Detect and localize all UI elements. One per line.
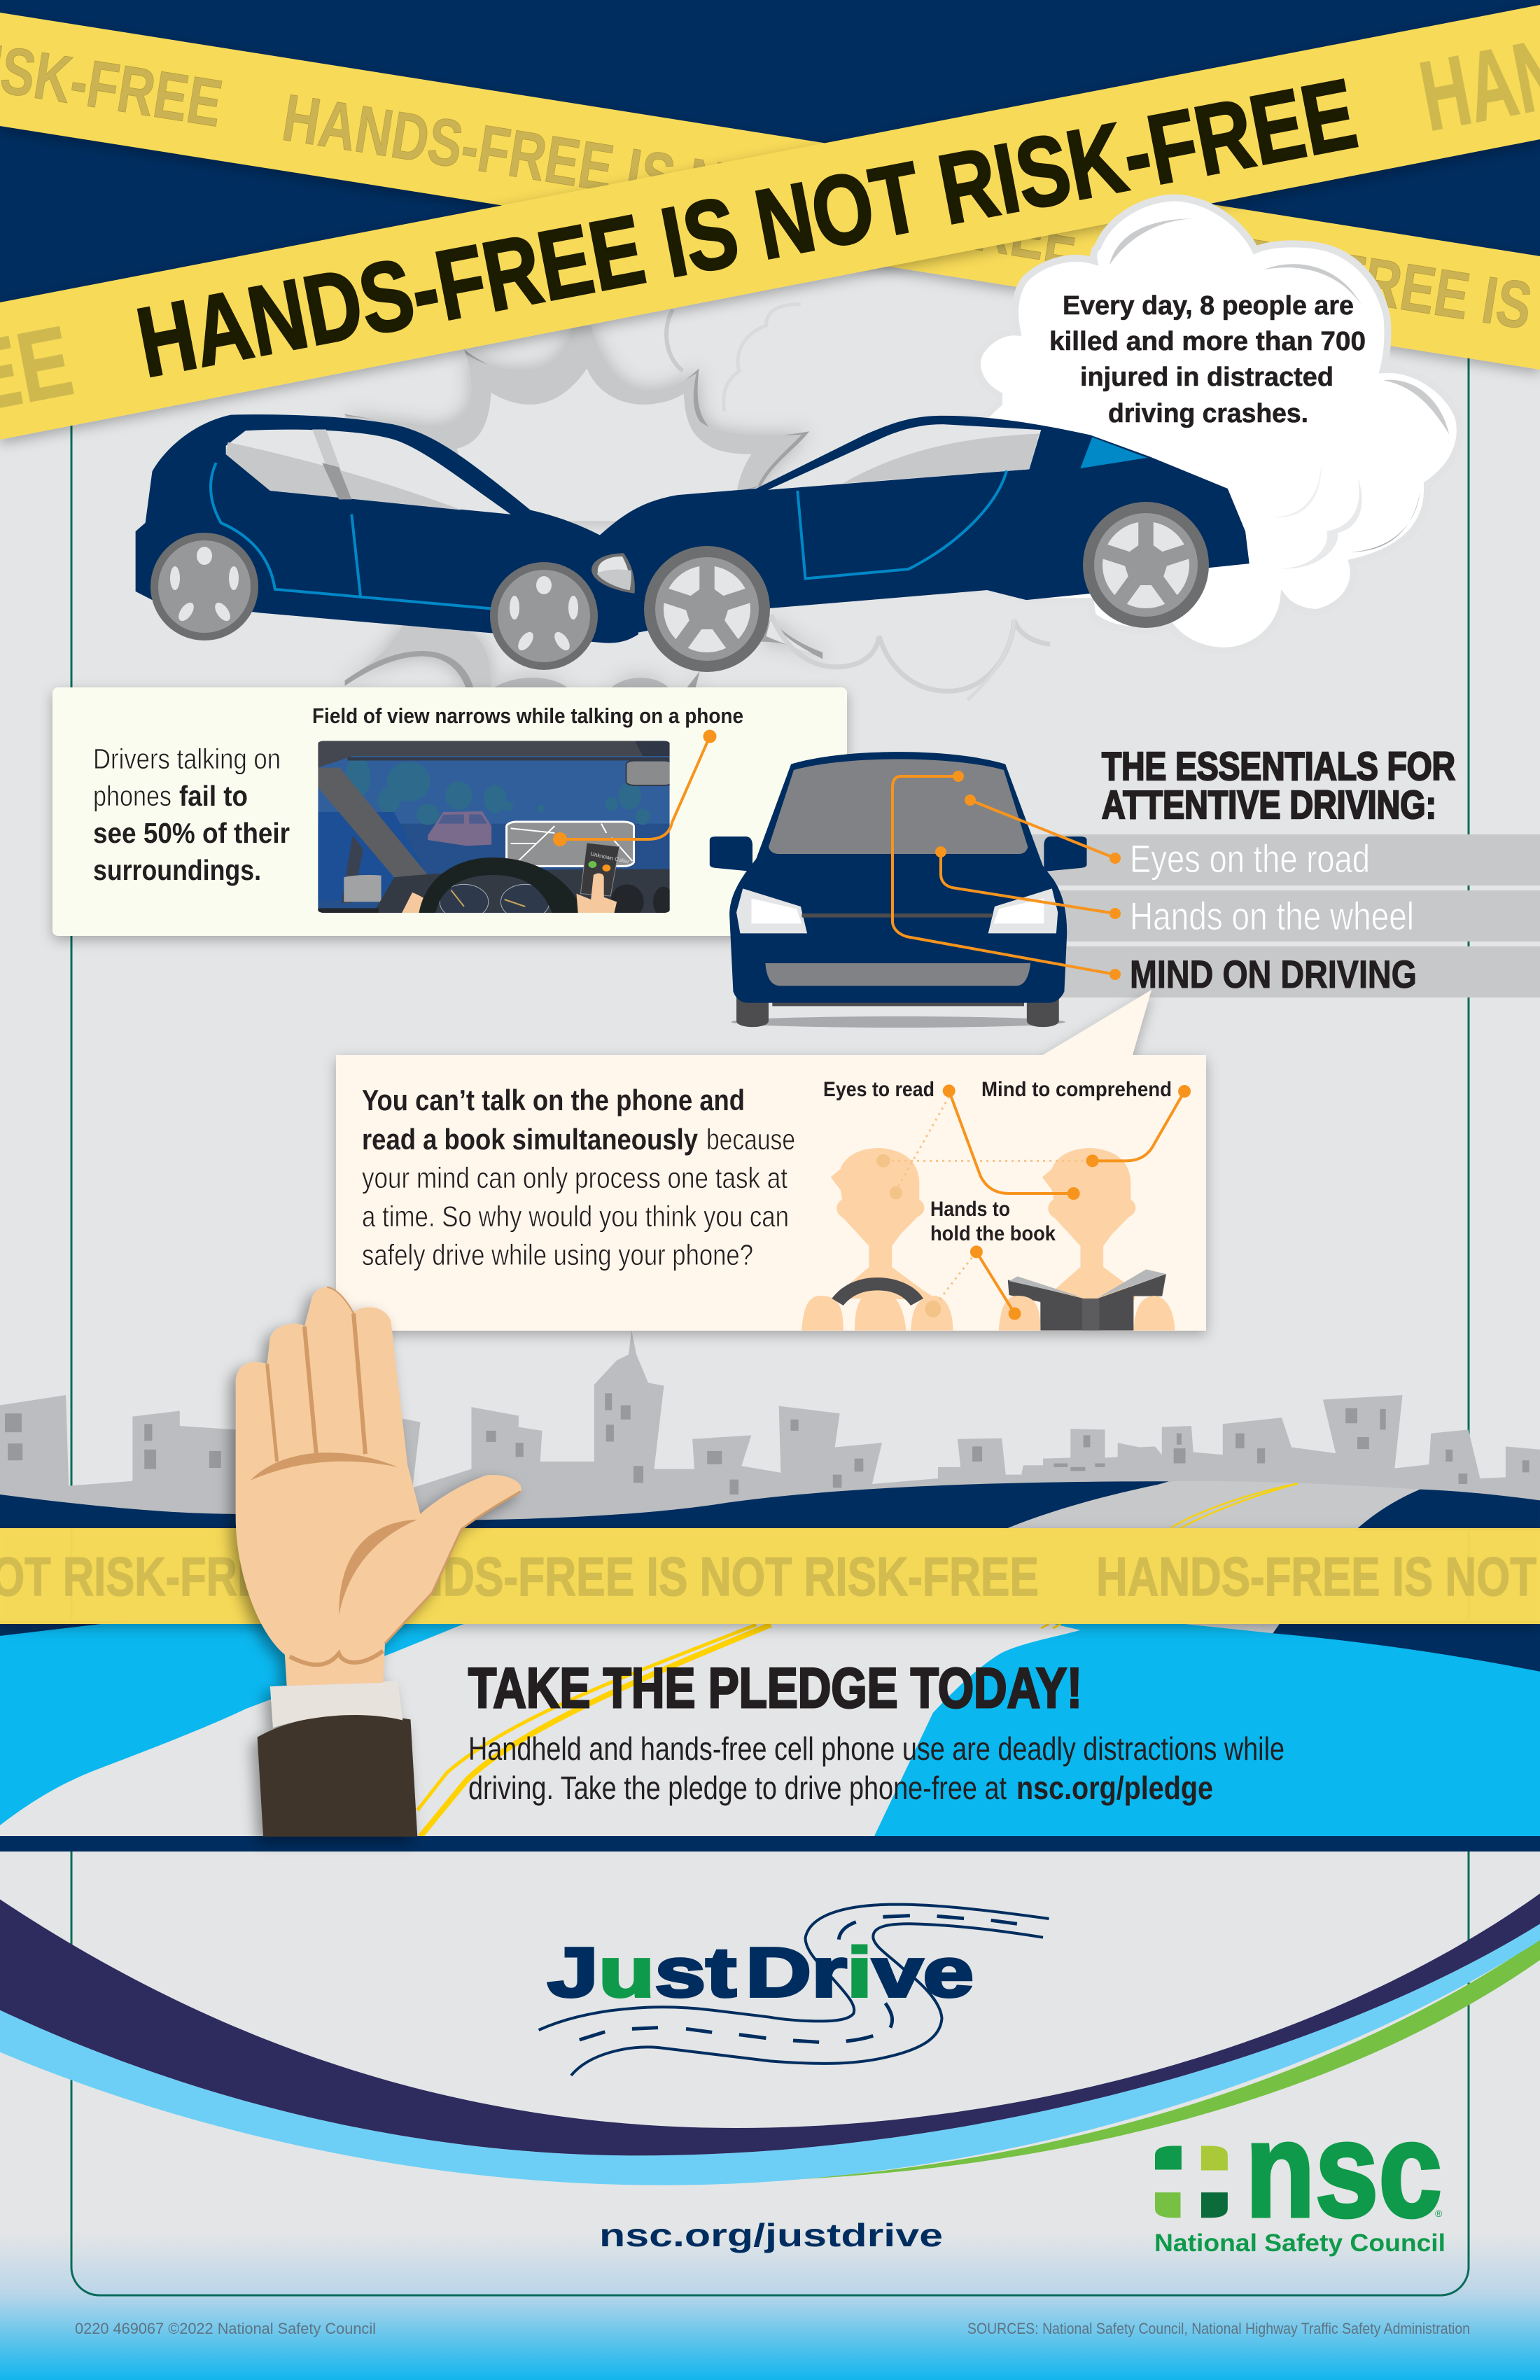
figure: reader: [1042, 1148, 1135, 1300]
lower burst: [345, 617, 822, 690]
heading: essentials: THE ESSENTIALS FOR: [1102, 744, 1455, 789]
council name: National Safety Council: [1154, 2230, 1446, 2257]
panel text: [362, 1084, 795, 1271]
label: mind on driving: MIND ON DRIVING: [1130, 952, 1417, 996]
labels on figures: Hands to: [930, 1198, 1010, 1221]
text: fail to see: Drivers talking on: [93, 743, 281, 775]
orange connector lines: [949, 1091, 1184, 1314]
word: Drive: Dr ive: [746, 1933, 974, 2012]
wheel: left car front: [490, 562, 598, 670]
logo: nsc: [1154, 2094, 1446, 2257]
footer gradient: [0, 2233, 1540, 2380]
band text: HANDS-FREE IS NOT RISK-FREE: [349, 1546, 1039, 1607]
label: hands on the wheel: Hands on the wheel: [1130, 894, 1414, 938]
statistic text: Every day, 8 people are: [1063, 291, 1354, 321]
labels on figures: hold the book: [930, 1222, 1056, 1245]
text: fail to see: surroundings.: [93, 854, 261, 886]
statistic text: driving crashes.: [1108, 399, 1308, 428]
wheel: right car rear: [1083, 502, 1209, 628]
panel text: because: [706, 1123, 795, 1156]
essentials bars: [1008, 834, 1540, 997]
label: eyes on the road: Eyes on the road: [1130, 836, 1370, 881]
text: fail to see: [93, 743, 290, 886]
navy header: [0, 0, 1540, 350]
smoke cloud with statistic: [966, 198, 1460, 651]
logo: JustDrive: [539, 1905, 1049, 2076]
icon: raised hand: [236, 1287, 522, 1837]
statistic text: killed and more than 700: [1049, 327, 1366, 356]
smoke outlines: [666, 304, 1050, 700]
callout dot top: [703, 729, 717, 743]
swooshes: [0, 1893, 1540, 2185]
left car: [136, 414, 638, 670]
clear view window: [507, 822, 634, 866]
palm and fingers: [236, 1287, 522, 1686]
pledge body text: driving. Take the pledge to drive phone-free at: [468, 1770, 1007, 1806]
front view car: [710, 752, 1121, 1028]
green swoosh: [770, 1939, 1540, 2180]
logo road: [539, 1905, 1049, 2076]
pledge body text: nsc.org/pledge: [1016, 1770, 1213, 1806]
sleeve: [258, 1715, 417, 1837]
figure: driver: [802, 1148, 953, 1331]
upper burst: [344, 326, 809, 521]
crashed cars: [136, 414, 1250, 672]
footer sources: SOURCES: National Safety Council, National Highway Traffic Safety Administration: [967, 2320, 1470, 2337]
text: fail to see: phones: [93, 780, 172, 812]
crash bursts and smoke: [344, 304, 1050, 700]
url: just drive: nsc.org/justdrive: [599, 2217, 943, 2253]
panel text: a time. So why would you think you can: [362, 1200, 789, 1233]
callout dot window: [553, 832, 567, 846]
callout line: [560, 736, 710, 839]
wheel: left car rear: [150, 533, 258, 640]
figures: driver and reader: [802, 1084, 1191, 1331]
caution tape band: [0, 1528, 1540, 1624]
panel text: read a book simultaneously: [362, 1123, 699, 1156]
caption: field of view: Field of view narrows while talking on a phone: [312, 704, 743, 728]
text: fail to see: fail to: [179, 780, 248, 812]
back tape text middle: HANDS-FREE IS NOT RISK-FREE: [278, 80, 1084, 280]
nsc wordmark: nsc: [1245, 2094, 1442, 2245]
right car: [592, 416, 1250, 672]
cross mark: [1155, 2146, 1228, 2218]
wheel: right car front: [644, 546, 770, 672]
pledge body text: Handheld and hands-free cell phone use are deadly distractions while: [468, 1730, 1284, 1767]
panel text: You can’t talk on the phone and: [362, 1084, 745, 1116]
skyline: [0, 1330, 1540, 1529]
text: fail to see: see 50% of their: [93, 817, 290, 849]
road and pledge background: [0, 1621, 1540, 1837]
labels on figures: [823, 1078, 1172, 1245]
panel: mind on driving: [336, 990, 1206, 1331]
dark swoosh: [0, 1893, 1540, 2155]
registered mark: ®: [1435, 2208, 1443, 2219]
panel text: safely drive while using your phone?: [362, 1238, 753, 1271]
labels on figures: Eyes to read: [823, 1078, 934, 1101]
statistic text: [1049, 291, 1366, 428]
labels on figures: Mind to comprehend: [981, 1078, 1172, 1101]
pledge body text: [468, 1730, 1284, 1806]
statistic text: injured in distracted: [1080, 363, 1334, 392]
light blue swoosh: [0, 1924, 1540, 2185]
heading: essentials: [1102, 744, 1455, 827]
illustration: driver's view: [318, 741, 674, 919]
heading: essentials: ATTENTIVE DRIVING:: [1102, 783, 1436, 827]
main caution tape: [0, 0, 1540, 492]
heading: take the pledge: TAKE THE PLEDGE TODAY!: [468, 1657, 1082, 1720]
back caution tape: [0, 13, 1540, 370]
orange dots: [935, 771, 1121, 980]
panel: field of view: [52, 687, 847, 936]
word: Just: Just: [547, 1933, 736, 2012]
cuff: [270, 1681, 402, 1728]
orange lines: eyes, hands, mind: [892, 776, 1115, 974]
phone screen text: Unknown Caller: [590, 850, 630, 865]
headlight: [592, 553, 635, 594]
panel text: your mind can only process one task at: [362, 1161, 788, 1194]
road above tape: [1002, 1481, 1540, 1531]
band text: [0, 1546, 1536, 1607]
bottom navy band: [0, 1836, 1540, 1851]
footer left: 0220 469067 ©2022 National Safety Council: [75, 2320, 376, 2337]
